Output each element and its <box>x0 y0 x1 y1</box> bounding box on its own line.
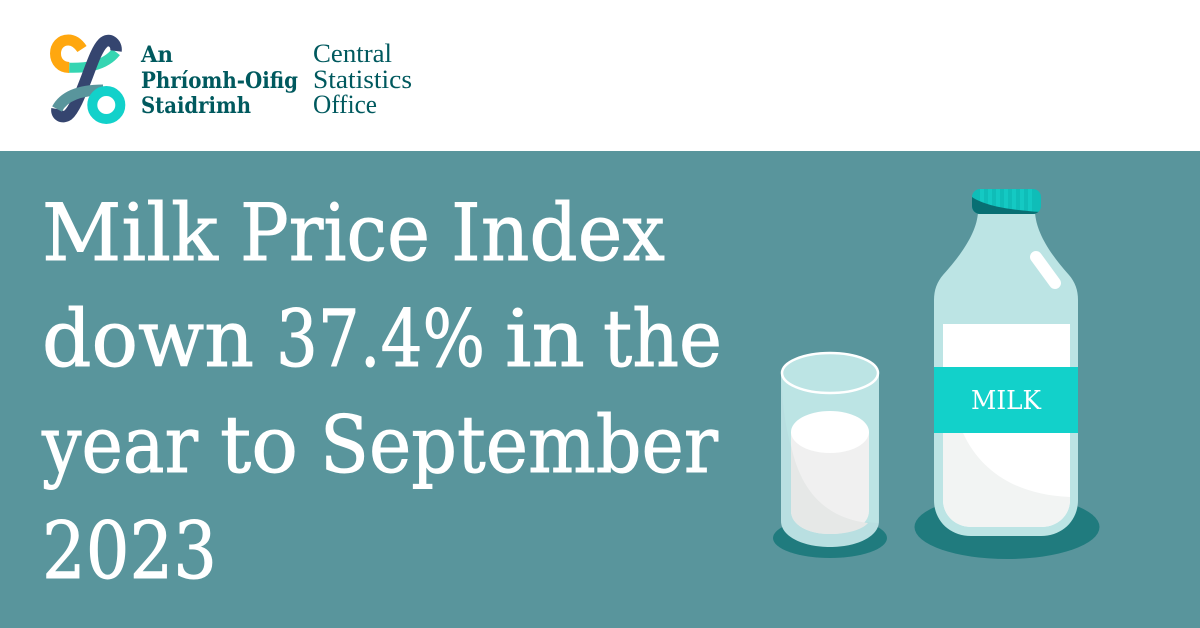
title line 2 <box>42 293 722 385</box>
title line 4: 2023 <box>42 505 217 597</box>
cap stripes <box>980 189 1032 214</box>
cap shade <box>972 197 1041 214</box>
bottle cap <box>972 189 1041 214</box>
An: An <box>140 42 173 68</box>
title <box>41 187 722 597</box>
title line 3: year <box>41 399 198 491</box>
bottle milk <box>943 324 1070 527</box>
Statistics: Statistics <box>313 65 412 94</box>
orange ring <box>56 40 82 68</box>
title line 3: September <box>320 399 718 491</box>
glass shadow <box>773 518 887 558</box>
title line 1 <box>42 187 665 279</box>
Staidrimh: Staidrimh <box>141 93 251 119</box>
glass body <box>781 373 879 547</box>
navy strand <box>57 41 116 117</box>
icon: glass of milk <box>773 353 887 558</box>
milk side <box>791 432 869 534</box>
logo English name <box>313 39 412 119</box>
title line 2: the <box>603 293 722 385</box>
title line 2: down <box>42 293 254 385</box>
title line 1: Milk <box>42 187 219 279</box>
logo Irish name <box>140 42 298 119</box>
main panel background <box>0 151 1200 628</box>
bottle shadow <box>914 495 1100 559</box>
title line 3: to <box>220 399 298 491</box>
bottle highlight <box>1036 257 1055 283</box>
logo symbol <box>56 40 120 119</box>
bottle glass <box>934 212 1078 536</box>
title line 2: in <box>505 293 585 385</box>
teal ring <box>92 91 120 119</box>
header band <box>0 0 1200 151</box>
milk side shading <box>791 445 868 534</box>
title line 1: Price <box>240 187 430 279</box>
label band <box>934 367 1078 433</box>
title line 2: 37.4% <box>276 293 485 385</box>
green band <box>69 52 116 68</box>
Phríomh-Oifig: Phríomh-Oifig <box>141 68 298 94</box>
title line 3 <box>41 399 718 491</box>
label text: MILK <box>971 386 1042 416</box>
milk shading <box>943 433 1070 527</box>
title line 1: Index <box>451 187 665 279</box>
Central: Central <box>313 39 392 68</box>
icon: milk bottle <box>914 189 1100 559</box>
glass rim <box>782 353 878 393</box>
Office: Office <box>313 90 377 119</box>
milk surface <box>791 411 869 453</box>
glass body shading <box>781 373 879 523</box>
grey teal band <box>57 90 103 109</box>
